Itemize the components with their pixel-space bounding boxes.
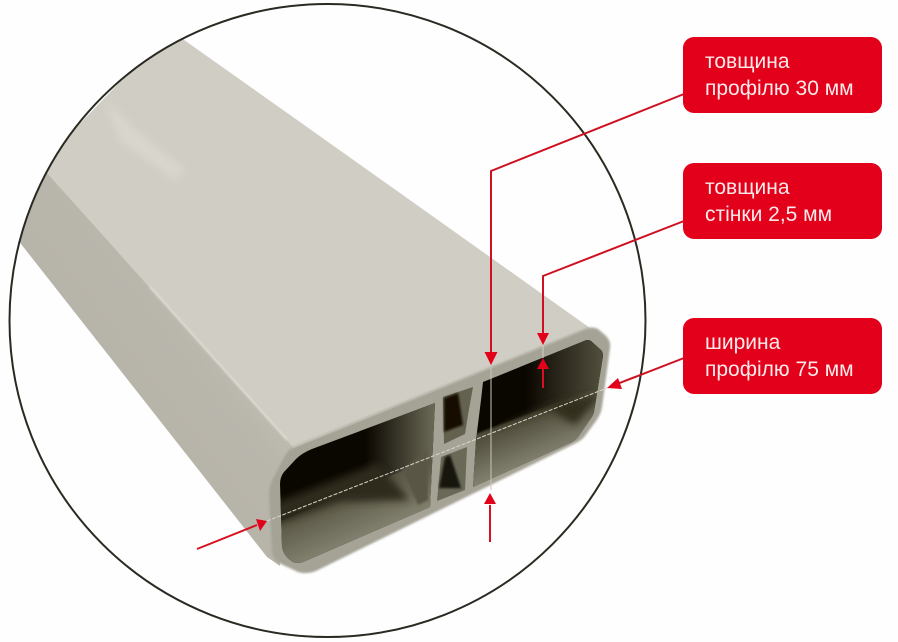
label: wall thickness 2.5 mm: [683, 163, 882, 239]
dashed width guide: [267, 388, 607, 521]
label: wall thickness 2.5 mm: стінки 2,5 мм: [705, 203, 832, 226]
upper chamber dark core: [444, 393, 463, 432]
circle outline: [10, 4, 646, 637]
label: profile width 75 mm: профілю 75 мм: [705, 358, 854, 381]
arrow: wall thickness from label: [537, 221, 684, 345]
small lower chamber: [437, 447, 467, 501]
arrow: thickness from below: [484, 493, 496, 542]
glossy ridge highlight: [150, 287, 287, 440]
right cavity: [473, 340, 603, 487]
small upper chamber: [443, 387, 473, 444]
label: profile width 75 mm: ширина: [705, 331, 781, 354]
lower chamber dark core: [439, 455, 461, 488]
top face of profile: [40, 30, 590, 447]
left cavity: [280, 403, 435, 563]
arrow: profile thickness from label: [484, 94, 684, 365]
label: wall thickness 2.5 mm: товщина: [705, 176, 790, 199]
label: profile thickness 30 mm: товщина: [705, 50, 790, 73]
arrow: wall thickness from below: [537, 358, 549, 388]
front rim of profile: [269, 328, 610, 573]
label: profile thickness 30 mm: [683, 37, 882, 113]
wall guide: [542, 345, 544, 358]
label: profile width 75 mm: [683, 318, 882, 394]
thickness guide: [490, 365, 492, 490]
profile photo: hollow extrusion: [10, 30, 610, 575]
arrow: width from label: [607, 358, 684, 389]
side face of profile: [10, 165, 293, 566]
label: profile thickness 30 mm: профілю 30 мм: [705, 77, 854, 100]
arrow: width from left: [197, 519, 267, 549]
top face soft highlight: [120, 125, 175, 172]
